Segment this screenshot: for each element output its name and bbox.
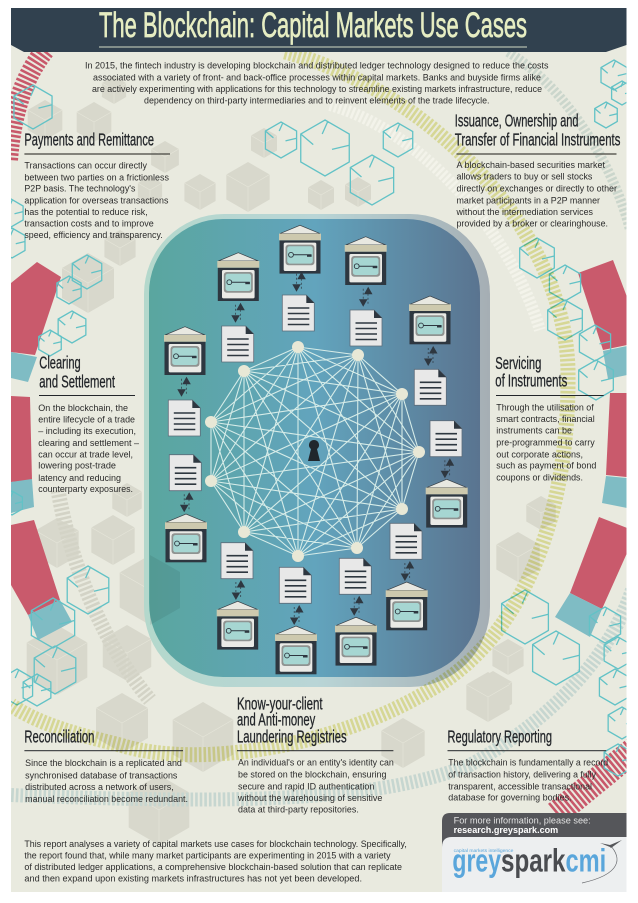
panel: Issuance, Ownership and Transfer	[455, 111, 621, 228]
panel: Clearing and Settlement: – including its execution,	[38, 426, 136, 436]
panel: Servicing of Instruments: pre-programmed to carry	[496, 437, 595, 447]
panel: Clearing and Settlement: lowering post-trade	[38, 461, 116, 471]
panel: Payments and Remittance: speed, efficiency and transparency.	[24, 230, 163, 240]
panel: Issuance, Ownership and Transfer: without the intermediation services	[455, 207, 594, 217]
panel: Clearing and Settlement: On the blockchain, the	[38, 403, 128, 413]
panel: Issuance, Ownership and Transfer: A blockchain-based securities market	[456, 160, 606, 170]
icons: bank nodes with keys	[164, 225, 468, 674]
closing paragraph: the report found that, while many market participants are experimenting in 2015 with a variety	[24, 851, 391, 861]
panel: Servicing of Instruments: smart contracts, financial	[496, 414, 595, 424]
panel: Clearing and Settlement: can occur at trade level,	[38, 450, 133, 460]
panel: Regulatory Reporting: transparent, accessible transactional	[448, 781, 592, 791]
panel: Regulatory Reporting: The blockchain is fundamentally a record	[448, 757, 608, 767]
panel: Servicing of Instruments: Through the utilisation of	[496, 402, 594, 412]
panel: Payments and Remittance	[24, 130, 170, 240]
intro text: In 2015, the fintech industry is developing blockchain and distributed ledger technology designed to reduce the costs	[85, 60, 549, 70]
panel: Reconciliation: distributed across a network of users,	[25, 782, 174, 792]
panel: Clearing and Settlement: Clearing	[39, 352, 81, 372]
panel: Reconciliation: synchronised database of transactions	[25, 770, 178, 780]
panel: Issuance, Ownership and Transfer: allows traders to buy or sell stocks	[456, 172, 593, 182]
panel: Servicing of Instruments: instruments can be	[496, 426, 572, 436]
panel: Regulatory Reporting: of transaction history, delivering a fully	[448, 770, 597, 780]
panel: Know-your-client and Anti-money Laundering Registries: be stored on the blockchain, ensuring	[238, 770, 387, 780]
panel: Know-your-client and Anti-money Laundering Registries: data at third-party repositories.	[238, 805, 359, 815]
panel: Servicing of Instruments	[495, 353, 604, 482]
intro text: dependency on third-party intermediaries and to reinvent elements of the trade lifecycle.	[144, 96, 490, 106]
panel: Know-your-client and Anti-money Laundering Registries: secure and rapid ID authentication	[238, 781, 374, 791]
panel: Issuance, Ownership and Transfer: directly on exchanges or directly to other	[456, 184, 617, 194]
more information box: research.greyspark.com	[454, 825, 558, 835]
panel: Know-your-client and Anti-money Laundering Registries: Know-your-client	[237, 693, 323, 713]
closing paragraph: of distributed ledger applications, a comprehensive blockchain-based solution that can replicate	[24, 862, 402, 872]
logo: greyspark cmi	[442, 837, 626, 892]
panel: Regulatory Reporting: Regulatory Reporting	[448, 726, 552, 746]
panel: Payments and Remittance: application for overseas transactions	[24, 196, 169, 206]
panel: Reconciliation: Since the blockchain is a replicated and	[25, 758, 182, 768]
panel: Clearing and Settlement: entire lifecycle of a trade	[38, 415, 135, 425]
grey cubes	[27, 76, 556, 845]
panel: Issuance, Ownership and Transfer: market participants in a P2P manner	[456, 196, 600, 206]
panel: Servicing of Instruments: out corporate actions,	[496, 450, 583, 460]
panel: Know-your-client and Anti-money Laundering Registries: and Anti-money	[237, 710, 315, 730]
panel: Reconciliation: manual reconciliation become redundant.	[25, 794, 188, 804]
network diagram: fully connected nodes	[205, 341, 425, 562]
panel: Issuance, Ownership and Transfer: provided by a broker or clearinghouse.	[456, 218, 608, 228]
panel: Payments and Remittance: Transactions can occur directly	[24, 160, 148, 170]
closing paragraph: This report analyses a variety of capital markets use cases for blockchain technology. Specifically,	[24, 839, 407, 849]
closing paragraph: and then expand upon existing markets infrastructures has not yet been developed.	[24, 874, 362, 884]
panel: Payments and Remittance: P2P basis. The technology's	[24, 184, 136, 194]
logo: greyspark cmi: capital markets intelligence	[454, 848, 514, 853]
panel: central rounded network panel	[144, 214, 490, 687]
panel: Clearing and Settlement: latency and reducing	[38, 473, 121, 483]
panel: Know-your-client and Anti-money Laundering Registries: without the warehousing of sensitive	[237, 793, 383, 803]
panel: Reconciliation	[24, 727, 188, 804]
logo: greyspark cmi: grey	[452, 843, 501, 879]
panel: Clearing and Settlement: clearing and settlement –	[38, 438, 139, 448]
panel: Servicing of Instruments: such as payment of bond	[496, 461, 596, 471]
panel: Know-your-client and Anti-money Laundering Registries: An individual's or an entity's identity can	[238, 758, 394, 768]
logo: greyspark cmi: spark	[501, 843, 566, 879]
red and teal arc segments	[11, 260, 627, 640]
teal hexagon outlines	[0, 60, 636, 776]
panel: Clearing and Settlement	[38, 352, 139, 494]
arrows: two-way exchanges	[177, 272, 454, 625]
panel: Payments and Remittance: Payments and Remittance	[24, 130, 154, 150]
panel: Servicing of Instruments: coupons or dividends.	[496, 472, 583, 482]
intro text: associated with a variety of front- and back-office processes within capital markets. Banks and buyside firms alike	[93, 72, 541, 82]
panel: Clearing and Settlement: and Settlement	[39, 371, 115, 391]
more information box: For more information, please see:	[454, 816, 591, 826]
panel: Know-your-client and Anti-money Laundering Registries: Laundering Registries	[237, 726, 347, 746]
panel: Servicing of Instruments: of Instruments	[495, 371, 567, 391]
icons: documents	[168, 295, 462, 603]
panel: Regulatory Reporting	[448, 726, 608, 803]
logo: greyspark cmi: cmi	[566, 843, 606, 879]
panel: Payments and Remittance: between two parties on a frictionless	[24, 172, 170, 182]
panel: Clearing and Settlement: counterparty exposures.	[38, 484, 133, 494]
yellow striped arc	[11, 52, 568, 755]
panel: Payments and Remittance: transaction costs and to improve	[24, 218, 154, 228]
panel: Know-your-client and Anti-money Laundering Registries	[237, 693, 394, 815]
closing paragraph	[24, 839, 407, 884]
panel: Payments and Remittance: has the potential to reduce risk,	[24, 207, 148, 217]
icon: keyhole	[308, 440, 320, 461]
panel: Regulatory Reporting: database for governing bodies.	[448, 793, 572, 803]
more information box	[442, 813, 626, 892]
intro text: are actively experimenting with applications for this technology to streamline existing markets infrastructure, reduce	[92, 84, 542, 94]
panel: Servicing of Instruments: Servicing	[495, 353, 541, 373]
panel: Reconciliation: Reconciliation	[24, 727, 94, 747]
intro text	[85, 60, 549, 106]
